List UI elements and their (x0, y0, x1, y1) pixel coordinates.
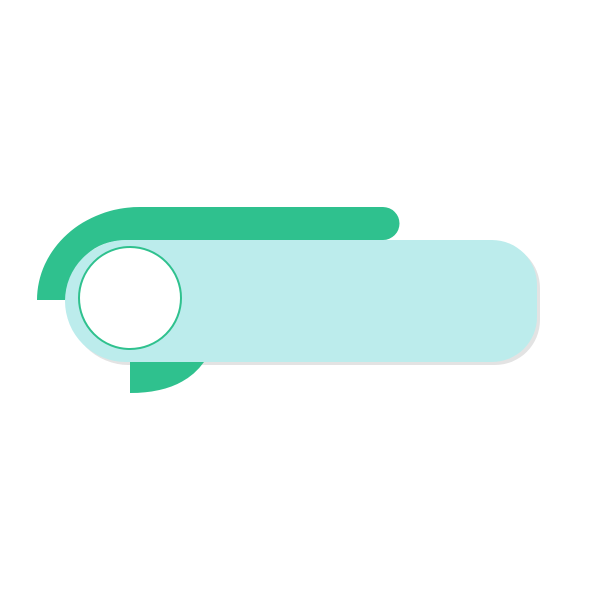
top green band (37, 207, 400, 300)
pill shadow (68, 243, 540, 365)
white circle (79, 247, 181, 349)
light cyan pill (65, 240, 537, 362)
bottom green wedge (130, 362, 204, 393)
